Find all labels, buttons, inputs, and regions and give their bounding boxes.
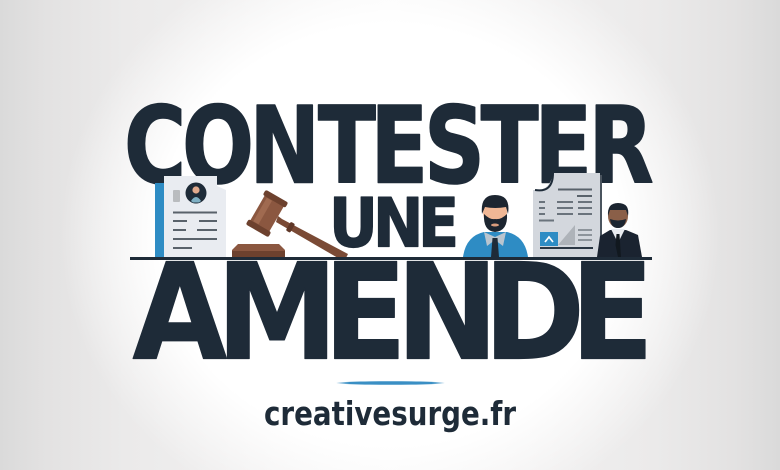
icon: CV document <box>155 176 226 257</box>
icon: man in blue shirt <box>463 195 528 257</box>
website address: creativesurge.fr <box>264 394 517 433</box>
icon: gavel <box>232 190 348 258</box>
icon: report document <box>533 173 602 257</box>
blue accent underline <box>336 381 444 385</box>
title word: AMENDE: AMENDE <box>132 236 654 391</box>
icon: man in dark suit <box>597 203 642 257</box>
shelf line <box>130 257 652 260</box>
title word: CONTESTER: CONTESTER <box>124 84 654 208</box>
title word: UNE: UNE <box>329 184 459 263</box>
